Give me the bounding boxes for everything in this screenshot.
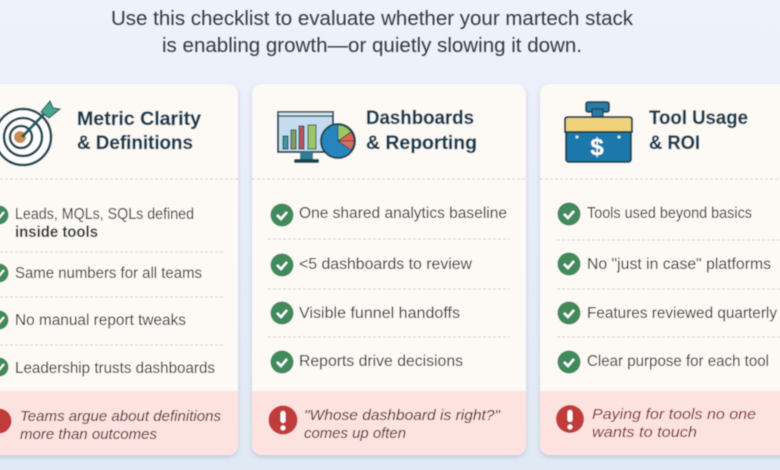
icon: toolbox with dollar sign: $	[590, 134, 604, 161]
warning: dashboards: comes up often	[304, 425, 406, 442]
warning: tool usage	[556, 405, 756, 441]
warning: tool usage: wants to touch	[592, 424, 697, 441]
checklist: dashboards: One shared analytics baseline	[299, 205, 507, 222]
checklist: tool usage: Clear purpose for each tool	[587, 353, 769, 370]
icon: toolbox with dollar sign	[565, 102, 632, 162]
checklist: dashboards: Reports drive decisions	[299, 353, 463, 370]
heading: metric clarity	[77, 109, 201, 154]
checklist: tool usage: Features reviewed quarterly	[587, 305, 777, 322]
checklist: metric clarity: No manual report tweaks	[15, 312, 186, 329]
checklist: metric clarity: Leads, MQLs, SQLs defined	[15, 206, 194, 223]
intro text	[111, 8, 634, 57]
panel: tool usage and roi	[540, 84, 780, 455]
intro text: Use this checklist to evaluate whether your martech stack	[111, 8, 634, 30]
warning: metric clarity: more than outcomes	[20, 426, 157, 443]
heading: metric clarity: Metric Clarity	[77, 109, 201, 130]
checklist: dashboards	[270, 204, 507, 374]
warning: tool usage: Paying for tools no one	[592, 406, 756, 423]
icon: monitor with bar chart and pie	[278, 112, 355, 163]
warning: metric clarity: Teams argue about definitions	[20, 408, 221, 425]
heading: dashboards	[366, 108, 477, 154]
checklist: dashboards: Visible funnel handoffs	[299, 305, 460, 322]
checklist: tool usage: No "just in case" platforms	[587, 256, 771, 273]
warning background	[252, 391, 526, 455]
checklist: metric clarity	[0, 206, 215, 377]
heading: dashboards: & Reporting	[366, 133, 477, 154]
checklist: tool usage: Tools used beyond basics	[587, 205, 752, 222]
heading: dashboards: Dashboards	[366, 108, 474, 129]
checklist: tool usage	[558, 202, 777, 374]
panel: metric clarity and definitions	[0, 84, 238, 455]
heading: tool usage: Tool Usage	[649, 108, 748, 129]
heading: tool usage: & ROI	[649, 133, 700, 154]
checklist: metric clarity: Same numbers for all teams	[15, 265, 202, 282]
icon: target with arrow	[0, 101, 60, 165]
heading: tool usage	[649, 108, 748, 154]
warning: dashboards	[268, 406, 501, 442]
heading: metric clarity: & Definitions	[77, 133, 193, 154]
checklist: metric clarity: inside tools	[15, 224, 98, 241]
warning background	[540, 391, 780, 455]
warning: dashboards: "Whose dashboard is right?"	[304, 407, 501, 424]
panel: dashboards and reporting	[252, 84, 526, 455]
warning background	[0, 391, 238, 455]
warning: metric clarity	[0, 408, 221, 443]
checklist: metric clarity: Leadership trusts dashboards	[15, 360, 215, 377]
intro text: is enabling growth—or quietly slowing it down.	[162, 35, 582, 57]
checklist: dashboards: <5 dashboards to review	[299, 256, 473, 273]
